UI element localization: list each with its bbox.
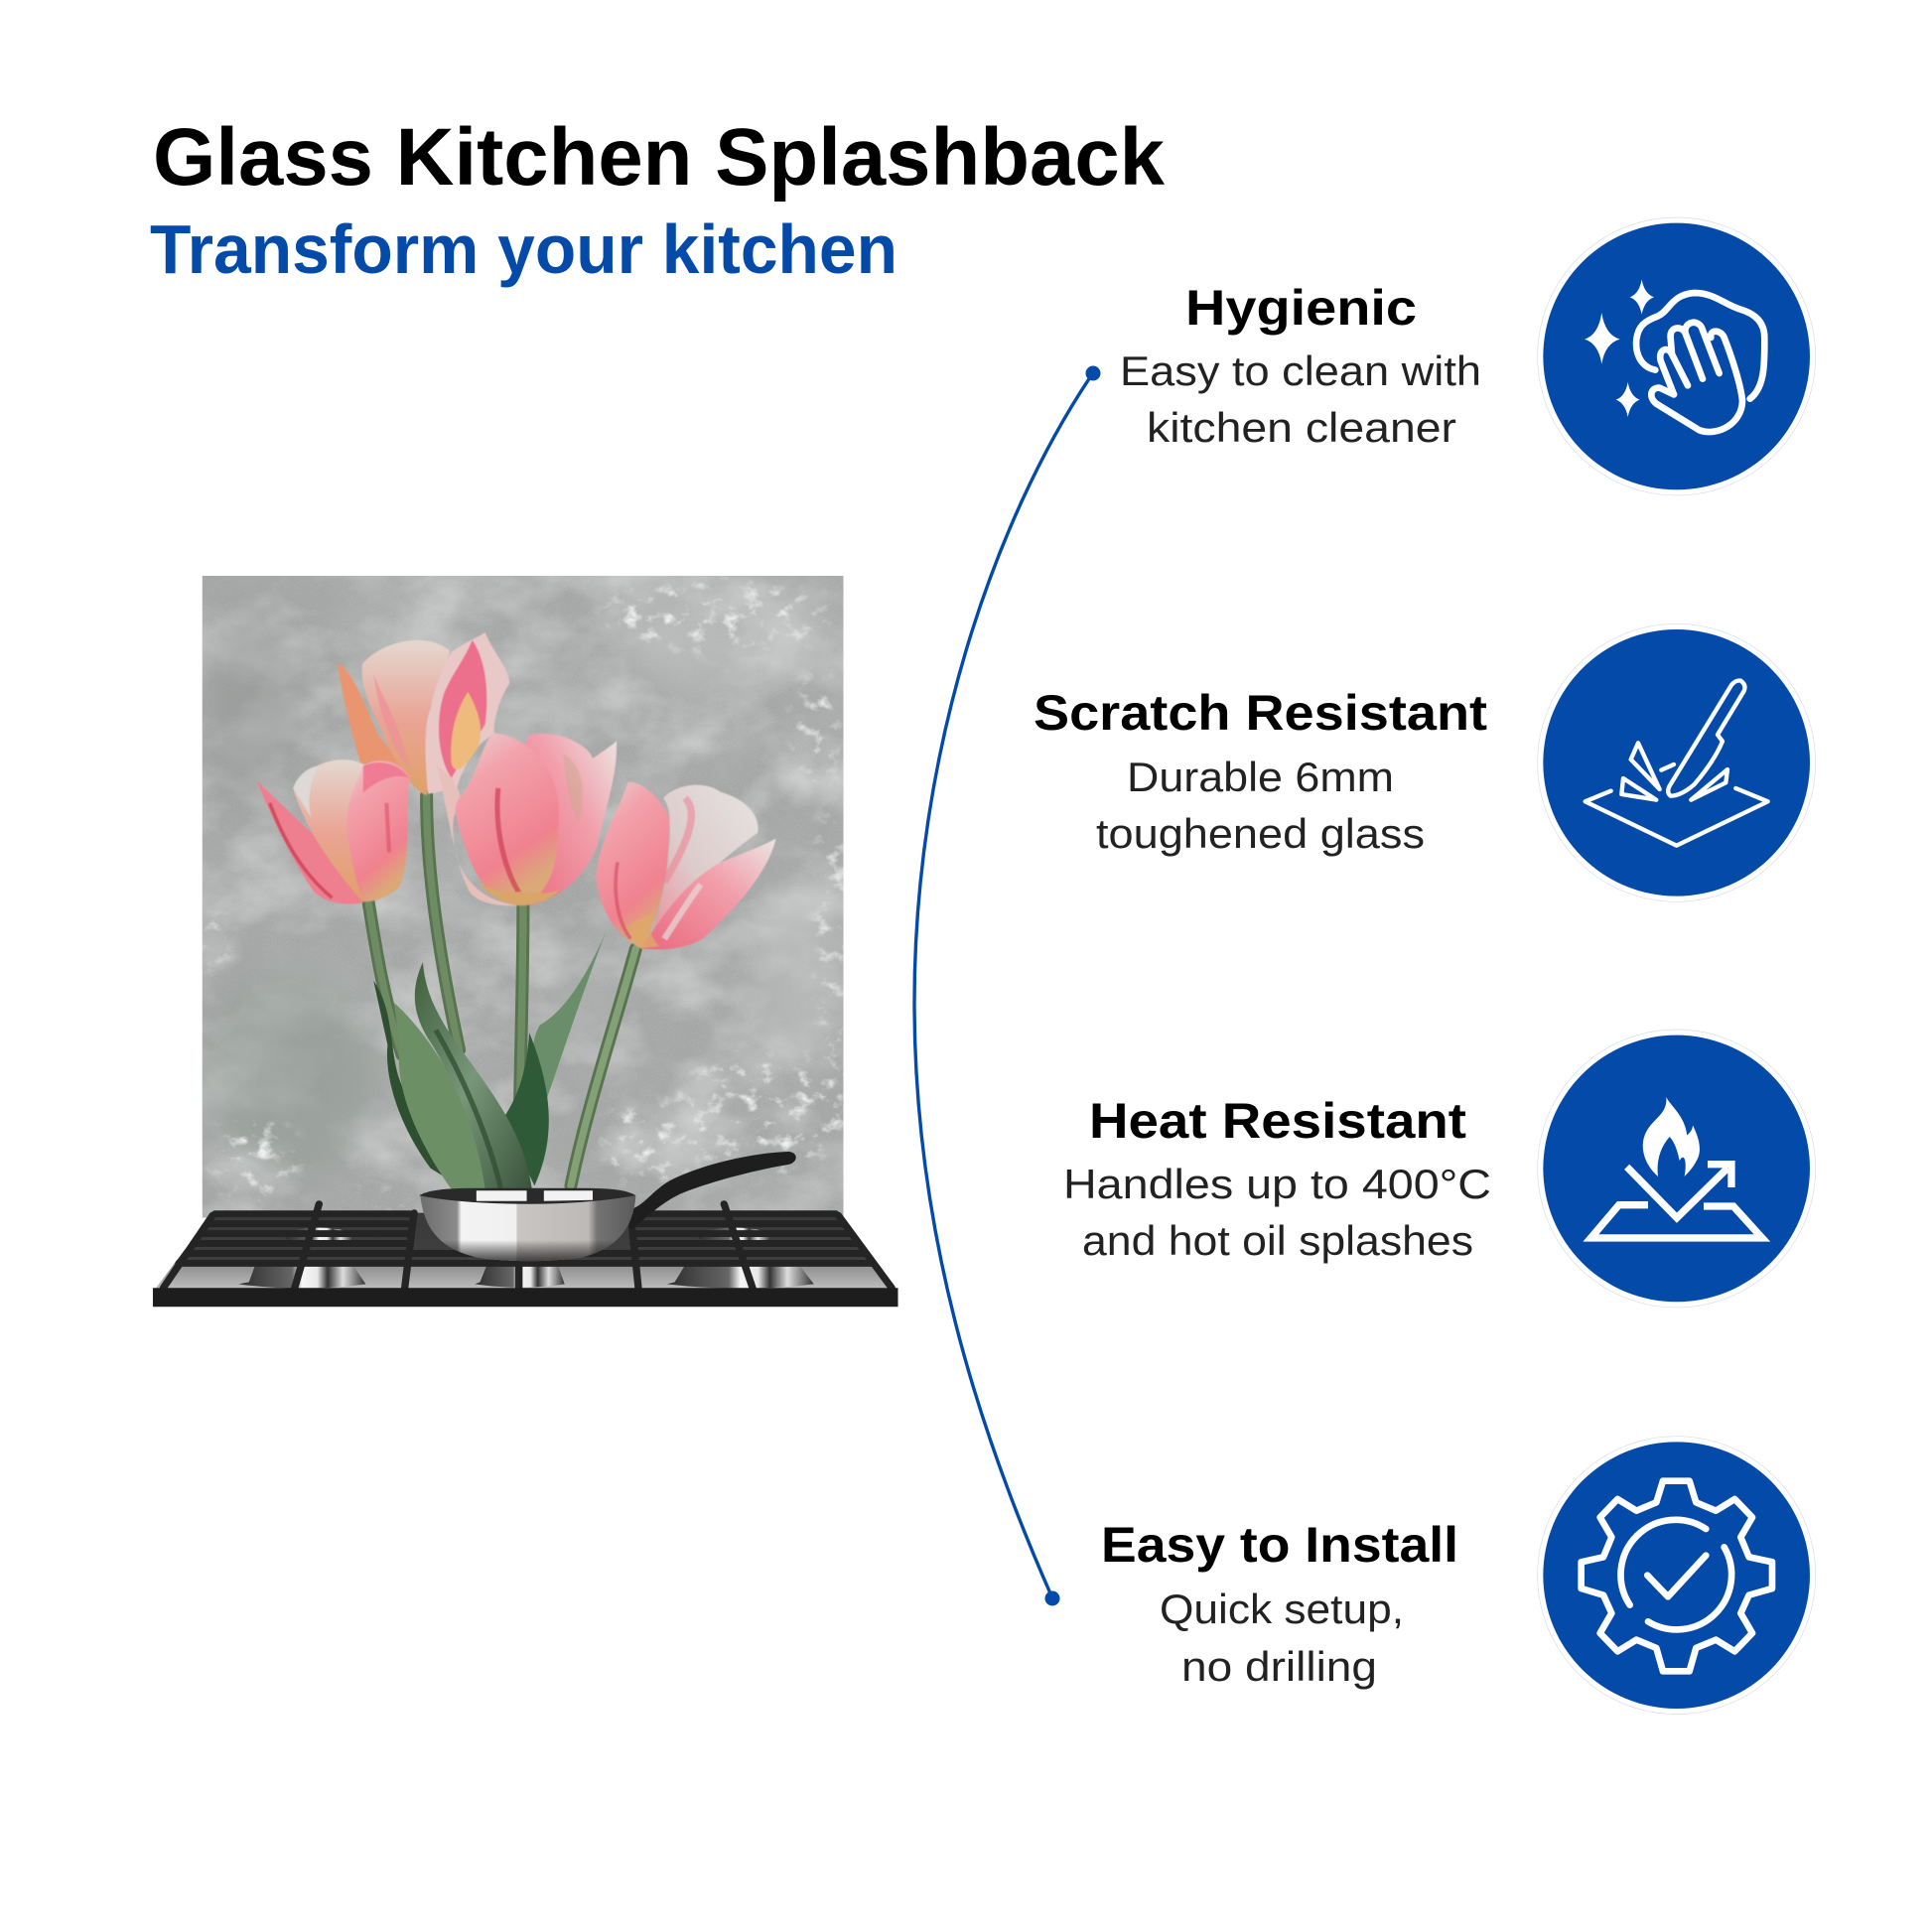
feature text: Easy to Install: no drilling bbox=[1181, 1643, 1377, 1690]
feature text: Hygienic bbox=[1120, 280, 1481, 451]
front burners bbox=[238, 1265, 814, 1289]
feature text: Heat Resistant: Handles up to 400°C bbox=[1063, 1161, 1491, 1207]
feature text: Heat Resistant: Heat Resistant bbox=[1089, 1093, 1466, 1149]
subtitle: Transform your kitchen bbox=[150, 210, 897, 288]
curve end dot: top bbox=[1086, 365, 1100, 381]
feature text: Hygienic: kitchen cleaner bbox=[1147, 404, 1456, 451]
hob front edge bbox=[153, 1288, 897, 1307]
connector curve bbox=[914, 365, 1100, 1598]
pan rim bbox=[419, 1188, 635, 1204]
feature text: Scratch Resistant: toughened glass bbox=[1096, 810, 1425, 857]
pan handle bbox=[625, 1152, 796, 1230]
tulip leaves bbox=[373, 931, 607, 1189]
hob grates bbox=[163, 1204, 892, 1288]
tulip: left bbox=[257, 759, 410, 904]
tulip: right bbox=[596, 782, 776, 949]
product image: tulip splashback above gas hob bbox=[153, 576, 897, 1307]
feature text: Easy to Install: Easy to Install bbox=[1101, 1517, 1458, 1573]
feature text: Hygienic: Easy to clean with bbox=[1120, 347, 1481, 394]
icon: hand wiping with sparkles bbox=[1538, 217, 1816, 495]
gas hob bbox=[153, 1204, 897, 1307]
feature text: Easy to Install bbox=[1101, 1517, 1458, 1690]
feature text: Scratch Resistant: Durable 6mm bbox=[1127, 754, 1394, 800]
tulip: back bbox=[338, 632, 509, 795]
frying pan bbox=[419, 1152, 796, 1261]
icon: flame and heat reflection bbox=[1538, 1030, 1816, 1308]
pan body bbox=[420, 1195, 635, 1261]
hob surface bbox=[153, 1213, 897, 1292]
feature text: Heat Resistant bbox=[1063, 1093, 1491, 1264]
icon: knife on glass bbox=[1538, 623, 1816, 901]
title: Glass Kitchen Splashback bbox=[153, 112, 1165, 203]
feature text: Easy to Install: Quick setup, bbox=[1160, 1586, 1404, 1632]
rear burners bbox=[285, 1228, 770, 1246]
tulip stems bbox=[368, 795, 635, 1185]
feature text: Hygienic: Hygienic bbox=[1185, 280, 1417, 336]
splashback panel bbox=[200, 576, 851, 1218]
feature text: Scratch Resistant bbox=[1034, 685, 1487, 857]
icon: gear with check mark bbox=[1538, 1437, 1816, 1715]
feature text: Scratch Resistant: Scratch Resistant bbox=[1034, 685, 1487, 741]
curve end dot: bottom bbox=[1044, 1590, 1060, 1606]
tulip: centre bbox=[437, 733, 617, 905]
feature text: Heat Resistant: and hot oil splashes bbox=[1082, 1217, 1473, 1264]
